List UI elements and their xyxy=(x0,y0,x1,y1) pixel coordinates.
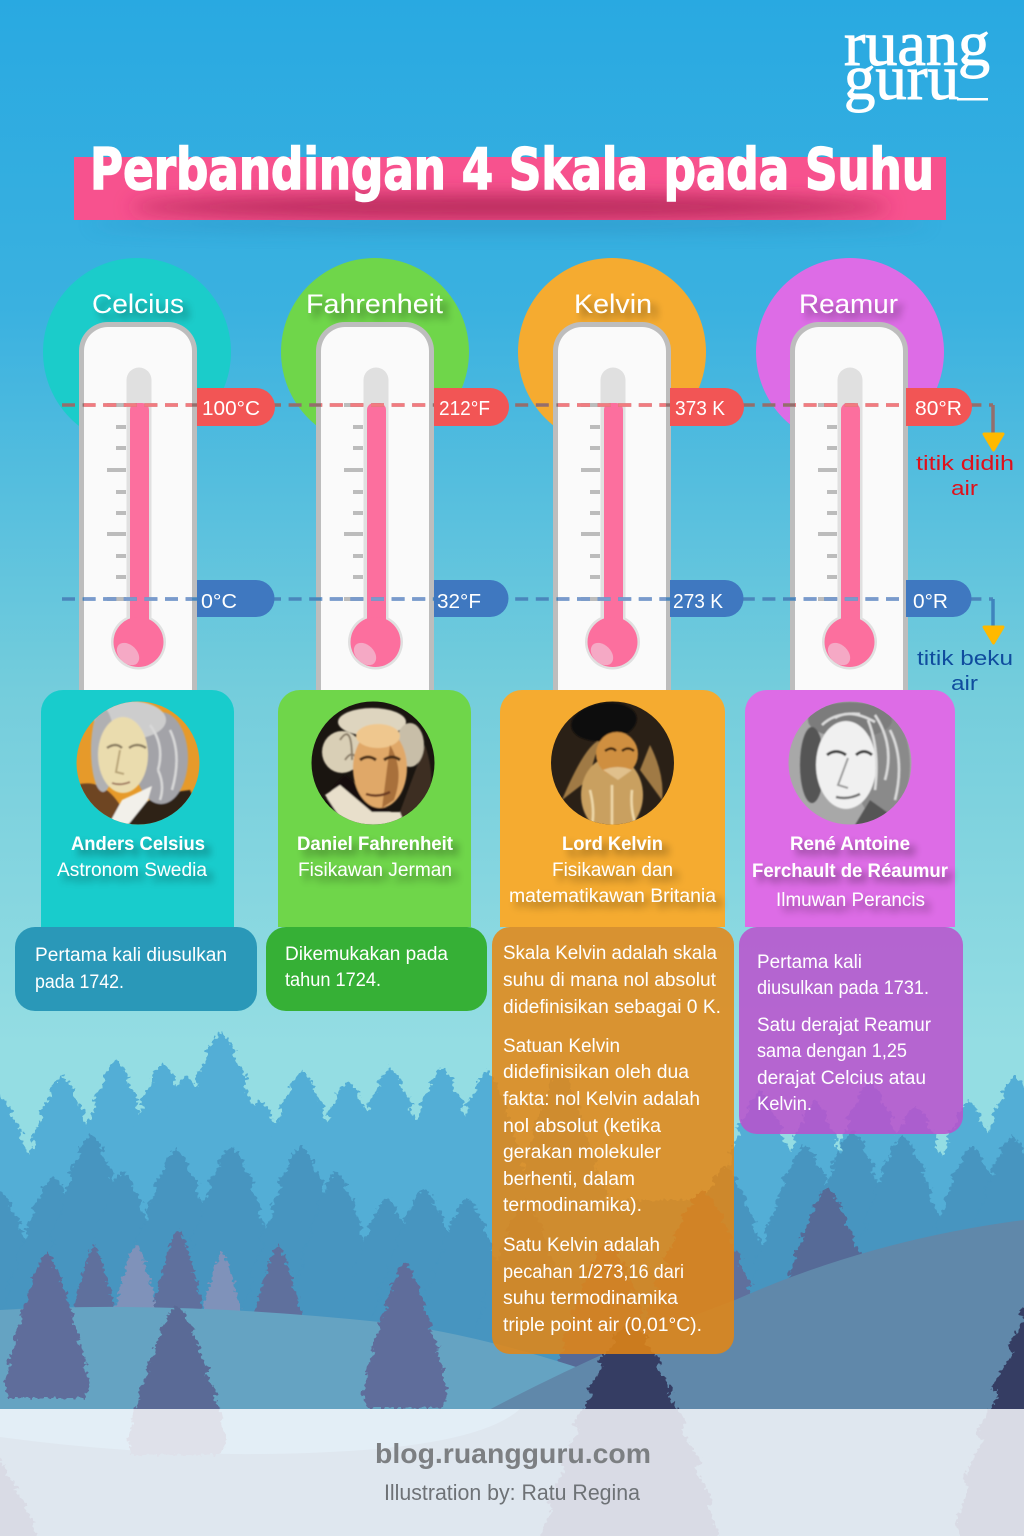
pill: 212°F xyxy=(434,388,509,426)
hill left xyxy=(0,1307,720,1420)
pill: 0°C: 0°C xyxy=(201,591,237,613)
note: Kelvin: pecahan 1/273,16 dari xyxy=(503,1262,684,1283)
logo: ruangguru: ruang xyxy=(844,8,990,79)
label: titik beku air: titik beku xyxy=(917,648,1013,670)
note: Kelvin: suhu di mana nol absolut xyxy=(503,970,717,991)
pill: 373 K xyxy=(670,388,744,426)
panel: Kelvin scale xyxy=(518,258,706,727)
note: Fahrenheit: Dikemukakan pada xyxy=(285,944,448,965)
panel: Reamur scale xyxy=(756,258,944,727)
panel: Reamur scale: Reamur xyxy=(799,289,898,319)
label: titik didih air: titik didih xyxy=(916,453,1014,475)
boiling point dashed line xyxy=(62,405,993,434)
card: Anders Celsius: Anders Celsius xyxy=(71,834,205,855)
footer credit: Illustration by: Ratu Regina xyxy=(384,1480,641,1505)
note: Reamur: Kelvin. xyxy=(757,1094,812,1115)
note: Reamur: Satu derajat Reamur xyxy=(757,1015,932,1036)
panel: Celcius scale: Celcius xyxy=(92,289,184,319)
logo: ruangguru xyxy=(844,8,990,113)
label: titik didih air: air xyxy=(951,478,978,500)
note: Reamur: derajat Celcius atau xyxy=(757,1068,926,1089)
forest middle layer xyxy=(0,1130,1024,1420)
note: Fahrenheit: tahun 1724. xyxy=(285,970,381,991)
pill: 32°F xyxy=(434,580,508,617)
note: Reamur: Pertama kali xyxy=(757,952,862,973)
card: Daniel Fahrenheit: Fisikawan Jerman xyxy=(298,860,452,881)
arrow: boiling point xyxy=(984,434,1003,450)
hill right xyxy=(470,1220,1024,1420)
card: Rene Antoine Ferchault de Reaumur: René Antoine xyxy=(790,834,910,855)
note: Celsius: Pertama kali diusulkan xyxy=(35,945,227,966)
card: Daniel Fahrenheit: Daniel Fahrenheit xyxy=(297,834,454,855)
note: Celsius: pada 1742. xyxy=(35,972,124,993)
pine trees behind the hills xyxy=(72,1187,870,1410)
note: Kelvin: suhu termodinamika xyxy=(503,1288,678,1309)
note: Kelvin xyxy=(492,927,734,1354)
note: Reamur: sama dengan 1,25 xyxy=(757,1041,907,1062)
pill: 273 K xyxy=(670,580,744,617)
label: titik beku air xyxy=(917,648,1013,695)
panel: Celcius scale xyxy=(43,258,231,727)
freezing point dashed line xyxy=(62,599,993,628)
panel: Kelvin scale: Kelvin xyxy=(574,289,652,319)
card: Rene Antoine Ferchault de Reaumur: Ilmuwan Perancis xyxy=(776,890,925,911)
note: Kelvin: didefinisikan oleh dua xyxy=(503,1062,689,1083)
card: Anders Celsius: Astronom Swedia xyxy=(57,860,207,881)
note: Kelvin: Satu Kelvin adalah xyxy=(503,1235,660,1256)
note: Kelvin: berhenti, dalam xyxy=(503,1169,635,1190)
note: Kelvin: Skala Kelvin adalah skala xyxy=(503,943,717,964)
label: titik beku air: air xyxy=(951,673,978,695)
note: Kelvin: didefinisikan sebagai 0 K. xyxy=(503,997,721,1018)
card: Daniel Fahrenheit xyxy=(278,690,471,927)
note: Kelvin: nol absolut (ketika xyxy=(503,1116,661,1137)
pine trees on left hill xyxy=(4,1253,448,1455)
pill: 100°C: 100°C xyxy=(202,398,260,420)
card: Rene Antoine Ferchault de Reaumur: Ferchault de Réaumur xyxy=(752,861,949,882)
note: Fahrenheit xyxy=(266,927,487,1011)
footer url: blog.ruangguru.com xyxy=(375,1438,651,1469)
note: Kelvin: gerakan molekuler xyxy=(503,1142,662,1163)
navy pine trees on right hill xyxy=(540,1263,1024,1536)
pill: 80°R xyxy=(906,388,972,426)
note: Kelvin: triple point air (0,01°C). xyxy=(503,1315,702,1336)
pill: 0°R xyxy=(906,580,972,617)
pill: 32°F: 32°F xyxy=(437,591,481,613)
note: Reamur: diusulkan pada 1731. xyxy=(757,978,929,999)
logo: ruangguru: guru xyxy=(844,42,959,113)
forest back layer xyxy=(0,1031,1024,1400)
note: Reamur xyxy=(739,927,963,1134)
portrait: Lord Kelvin xyxy=(551,699,675,833)
note: Kelvin: fakta: nol Kelvin adalah xyxy=(503,1089,700,1110)
panel: Fahrenheit scale: Fahrenheit xyxy=(306,289,444,319)
pill: 80°R: 80°R xyxy=(915,398,962,420)
title banner xyxy=(74,137,946,230)
panel: Fahrenheit scale xyxy=(281,258,469,727)
card: Lord Kelvin: Lord Kelvin xyxy=(562,834,663,855)
pill: 212°F: 212°F xyxy=(439,398,490,420)
arrow: freezing point xyxy=(984,627,1003,643)
card: Lord Kelvin: Fisikawan dan xyxy=(552,860,673,881)
footer band xyxy=(0,1409,1024,1536)
note: Kelvin: Satuan Kelvin xyxy=(503,1036,620,1057)
pill: 273 K: 273 K xyxy=(673,591,724,613)
portrait: Daniel Fahrenheit xyxy=(311,701,435,825)
portrait: Anders Celsius xyxy=(76,701,205,825)
note: Kelvin: termodinamika). xyxy=(503,1195,642,1216)
pill: 100°C xyxy=(197,388,275,426)
label: titik didih air xyxy=(916,453,1014,500)
card: Lord Kelvin: matematikawan Britania xyxy=(509,886,716,907)
pill: 0°R: 0°R xyxy=(913,591,948,613)
pill: 373 K: 373 K xyxy=(675,398,726,420)
card: Lord Kelvin xyxy=(500,690,725,927)
portrait: Rene de Reaumur xyxy=(788,701,912,825)
card: Rene Antoine Ferchault de Reaumur xyxy=(745,690,955,927)
note: Celsius xyxy=(15,927,257,1011)
card: Anders Celsius xyxy=(41,690,234,927)
pill: 0°C xyxy=(197,580,274,617)
